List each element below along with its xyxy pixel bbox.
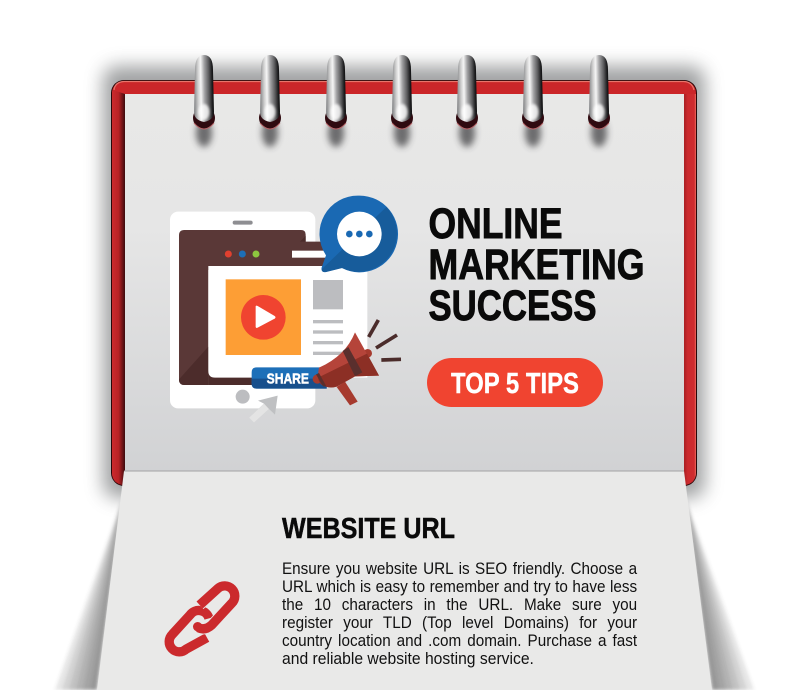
icon: chain link [169, 586, 235, 652]
megaphone horn [318, 332, 379, 387]
notebook shadow [55, 66, 754, 690]
tablet home button [236, 390, 250, 404]
upper link end cap [193, 622, 202, 631]
body text: Ensure you website URL is SEO friendly. Choose a [282, 559, 637, 578]
share button: SHARE [267, 371, 309, 387]
lower page [97, 471, 712, 690]
megaphone handle [337, 382, 358, 405]
spiral rings [193, 55, 610, 147]
title [428, 200, 644, 330]
video thumbnail [226, 279, 301, 355]
upper link [198, 586, 235, 629]
megaphone [313, 320, 401, 405]
body text: and reliable website hosting service. [282, 649, 534, 668]
body text [282, 559, 638, 668]
title: SUCCESS [428, 282, 596, 330]
megaphone bands [343, 347, 362, 376]
megaphone rear [313, 374, 322, 384]
megaphone cap [363, 349, 372, 358]
megaphone sound rays [369, 320, 401, 360]
title: MARKETING [428, 241, 644, 289]
body text: register your TLD (Top level Domains) for your [282, 613, 637, 632]
title: ONLINE [428, 200, 562, 248]
body text: country location and .com domain. Purchase a fast [282, 631, 637, 650]
body text: the 10 characters in the URL. Make sure you [282, 595, 637, 614]
body text: URL which is easy to remember and try to have less [282, 577, 637, 596]
share button [252, 367, 327, 389]
badge: top 5 tips: TOP 5 TIPS [451, 368, 579, 400]
badge: top 5 tips [427, 358, 603, 407]
upper link halo [198, 586, 235, 629]
heading: website url: WEBSITE URL [282, 513, 455, 545]
article image and lines [313, 280, 343, 355]
web page panel [208, 266, 367, 378]
notebook upper page [125, 94, 684, 471]
cursor arrow [249, 396, 278, 423]
tablet speaker [233, 221, 253, 225]
tablet body [170, 212, 315, 408]
window dots [225, 250, 259, 257]
speech bubble [319, 196, 398, 272]
browser window frame [179, 230, 330, 385]
address bar [292, 251, 329, 258]
icon: tablet with video and share [170, 196, 398, 423]
lower link [169, 610, 209, 652]
notebook red cover [111, 80, 697, 486]
